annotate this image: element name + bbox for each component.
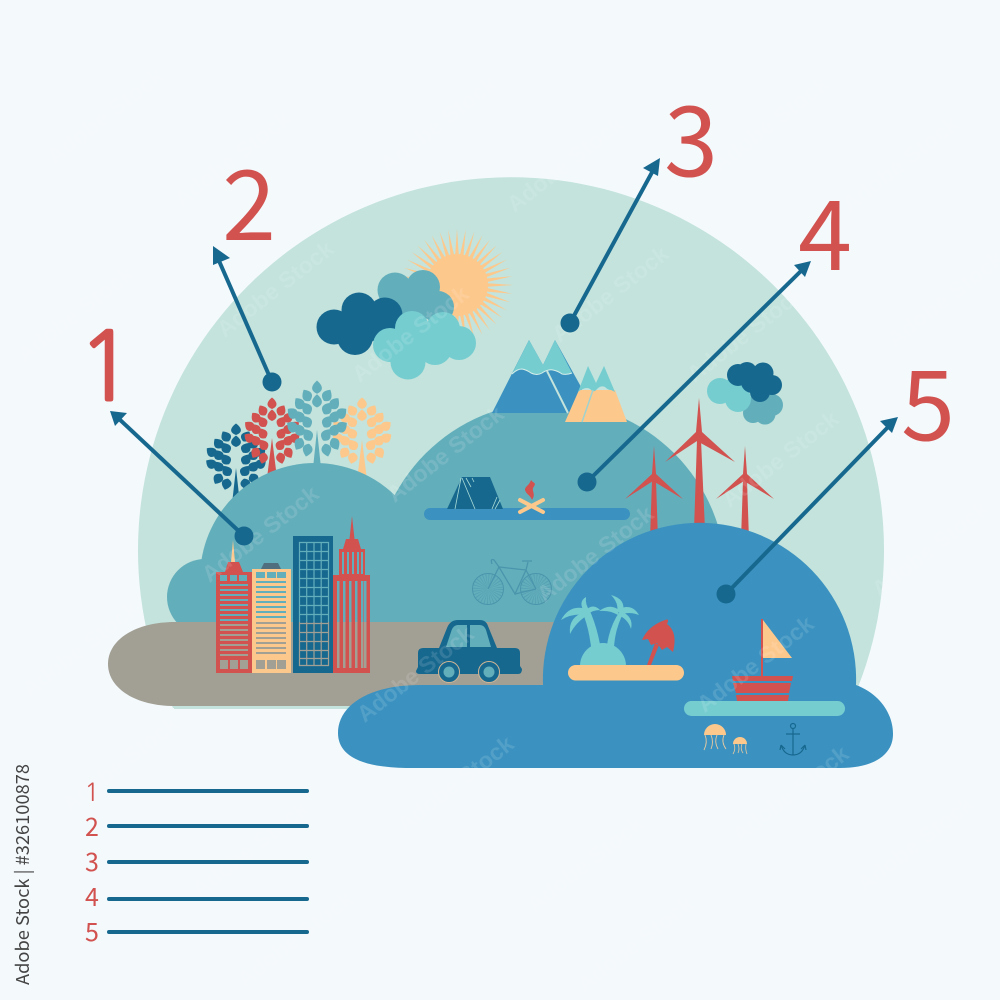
watermark: Adobe Stock	[502, 110, 629, 217]
palm mound	[580, 643, 626, 666]
arrow 5	[716, 417, 898, 604]
building: red stepped skyscraper	[333, 516, 370, 673]
turbine: large	[665, 398, 735, 530]
watermark: Adobe Stock	[347, 280, 474, 387]
boat mast	[761, 619, 763, 677]
mountains	[492, 340, 627, 422]
watermark: Adobe Stock	[692, 610, 819, 717]
number 3: 3	[664, 63, 718, 204]
watermark: Adobe Stock	[187, 795, 314, 902]
watermark: Adobe Stock	[57, 710, 184, 817]
icon: campfire	[520, 480, 543, 512]
watermark: Adobe Stock	[727, 740, 854, 847]
legend numbers: 3	[85, 843, 99, 879]
island sand	[568, 665, 684, 680]
watermark: Adobe Stock	[17, 595, 144, 702]
turbine: left	[625, 446, 683, 540]
arrow 3	[560, 158, 660, 332]
tree: dark blue	[203, 423, 269, 504]
watermark: Adobe Stock	[852, 790, 979, 897]
mountain: back range	[492, 340, 590, 413]
icon: bicycle	[472, 560, 552, 604]
jellyfish: small	[733, 737, 747, 754]
building: red slatted tower	[216, 540, 252, 673]
legend	[84, 780, 307, 949]
sea and beach landmass	[338, 523, 893, 768]
palm trees	[561, 595, 639, 656]
sailboat	[684, 619, 845, 716]
arrow 2	[213, 246, 282, 392]
watermark: Adobe Stock	[717, 405, 844, 512]
jellyfish: large	[704, 724, 726, 750]
building: peach slatted tower	[252, 563, 291, 673]
cloud group: centre	[316, 270, 476, 380]
cloud: right mid teal	[743, 392, 783, 424]
hills	[167, 402, 726, 754]
watermark: Adobe Stock	[532, 500, 659, 607]
arrow 4	[578, 261, 811, 492]
icon: anchor	[780, 724, 806, 755]
icon: car	[416, 620, 522, 682]
city buildings	[216, 516, 370, 673]
arrow 1	[110, 411, 254, 546]
building: dark blue grid tower	[293, 536, 333, 673]
jellyfish	[704, 724, 747, 754]
turbine: right	[716, 446, 774, 540]
sun	[401, 229, 513, 341]
watermark: Adobe Stock	[392, 730, 519, 837]
trees	[203, 381, 394, 504]
icon: tent	[447, 477, 503, 509]
tree: red	[242, 397, 302, 478]
cloud: right light teal	[707, 377, 751, 412]
watermark: Adobe Stock	[375, 70, 502, 177]
legend lines	[109, 791, 307, 932]
number 5: 5	[901, 327, 955, 468]
campsite ground	[424, 508, 630, 520]
watermark: Adobe Stock	[352, 620, 479, 727]
watermark: Adobe Stock	[212, 235, 339, 342]
wind turbines	[625, 398, 774, 540]
legend numbers: 5	[85, 913, 99, 949]
tree: teal	[284, 381, 350, 468]
watermark: Adobe Stock	[867, 495, 994, 602]
watermark: Adobe Stock	[169, 105, 296, 212]
watermark: Adobe Stock	[42, 62, 169, 169]
beach umbrella	[642, 620, 675, 665]
road	[108, 622, 560, 706]
legend numbers	[84, 780, 100, 949]
cloud: dark blue	[316, 292, 402, 355]
watermark: Adobe Stock	[522, 810, 649, 917]
cloud: light teal	[373, 311, 476, 380]
cloud: right dark blue	[727, 362, 782, 402]
number 2: 2	[222, 127, 276, 268]
campsite	[424, 477, 630, 520]
watermark: Adobe Stock	[232, 885, 359, 992]
legend numbers: 4	[85, 878, 99, 914]
boat water	[684, 701, 845, 716]
legend numbers: 2	[85, 808, 99, 844]
watermark: Adobe Stock	[12, 260, 139, 367]
watermark: Adobe Stock	[547, 240, 674, 347]
cloud: mid teal	[378, 270, 454, 325]
watermark: Adobe Stock	[197, 480, 324, 587]
large callout numbers	[77, 63, 955, 468]
watermark: Adobe Stock	[382, 400, 509, 507]
watermark: Adobe Stock	[837, 110, 964, 217]
mountain: front range	[565, 366, 627, 422]
palm island	[561, 595, 684, 680]
legend numbers: 1	[84, 780, 100, 805]
number 4: 4	[798, 157, 852, 298]
watermark: Adobe Stock	[707, 70, 834, 177]
background dome	[138, 177, 884, 708]
stock id side text: Adobe Stock | #326100878	[9, 764, 35, 985]
road shadow strip	[174, 706, 354, 709]
cloud group: right	[707, 362, 783, 424]
boat hull	[732, 676, 793, 701]
watermark: Adobe Stock	[572, 890, 699, 997]
number 1: 1	[77, 319, 135, 414]
tree: peach	[330, 397, 394, 480]
watermark: Adobe Stock	[682, 280, 809, 387]
boat sail	[763, 620, 792, 658]
